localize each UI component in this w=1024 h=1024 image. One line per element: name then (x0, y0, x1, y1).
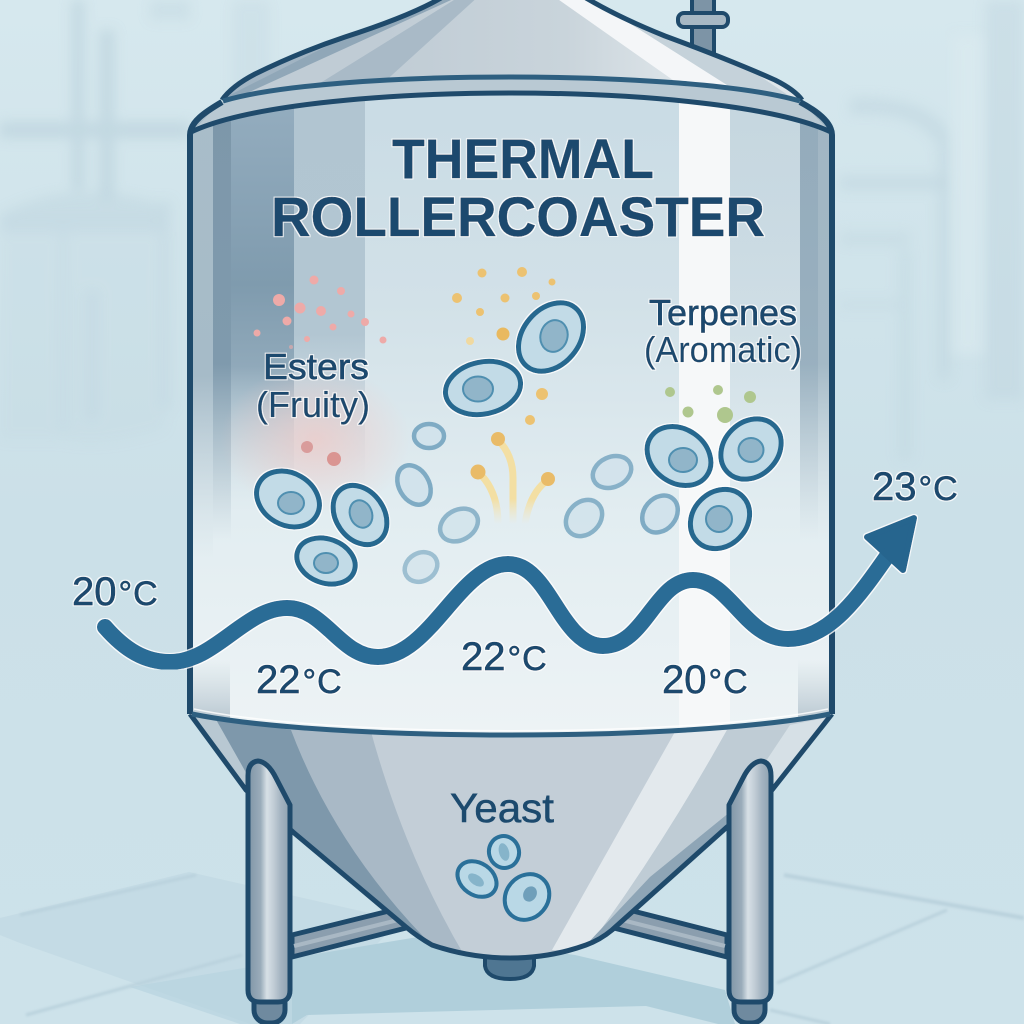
label: terpenes (644, 292, 802, 370)
label: 22 low: 22°C (256, 658, 342, 702)
yeast settled at bottom: Yeast (450, 785, 555, 831)
label: terpenes: Terpenes (649, 292, 797, 333)
rising bubbles (470, 432, 555, 524)
temperature wave arrow (105, 518, 914, 662)
legs (248, 761, 771, 1023)
rim band (198, 80, 826, 127)
valve pipe (678, 0, 728, 54)
label: esters: (Fruity) (256, 384, 370, 425)
tank cone (188, 714, 834, 960)
label: 20 start: 20°C (72, 570, 158, 614)
yeast cells: faded (391, 424, 685, 588)
title: ROLLERCOASTER (271, 185, 765, 248)
label: esters (256, 346, 370, 425)
yeast cells: main (246, 290, 793, 592)
ester droplets (254, 276, 386, 466)
drain nozzle (485, 955, 534, 979)
leg cross braces (292, 911, 727, 957)
terpene droplets (665, 385, 756, 423)
label: 20 right: 20°C (662, 658, 748, 702)
label: esters: Esters (263, 346, 369, 387)
title: THERMAL (392, 127, 654, 190)
label: 22 mid: 22°C (461, 635, 547, 679)
temperature labels (72, 465, 958, 702)
central aroma droplets (452, 267, 556, 425)
tank body (185, 60, 838, 740)
floor tiles and shadow (0, 872, 1024, 1024)
tank roof (220, 0, 804, 102)
label: 23 end: 23°C (872, 465, 958, 509)
yeast settled at bottom (450, 785, 559, 929)
title (271, 127, 765, 248)
label: terpenes: (Aromatic) (644, 329, 802, 370)
